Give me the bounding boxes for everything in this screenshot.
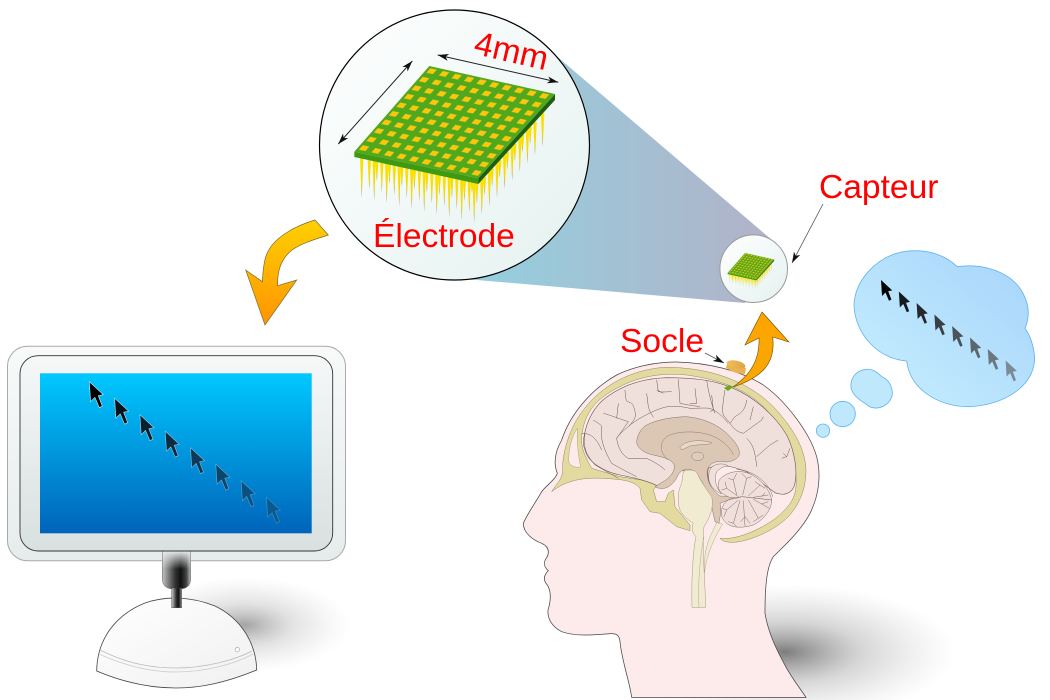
skull and meninges — [552, 367, 806, 542]
arrow: width dimension — [438, 55, 558, 82]
corpus callosum and thalamus — [637, 417, 739, 523]
label: Socle: Socle — [620, 323, 704, 360]
arrow: Socle pointer — [705, 353, 724, 363]
cerebrum — [583, 378, 796, 498]
lateral ventricle — [661, 432, 733, 460]
arrow: depth dimension — [338, 61, 412, 144]
cerebellum — [718, 469, 773, 527]
icon: electrode array — [354, 66, 555, 223]
icon: monitor — [8, 346, 346, 688]
monitor outer frame — [8, 346, 346, 561]
parahippocampal gyrus — [709, 464, 728, 494]
head outline — [523, 362, 819, 697]
cursors in thought cloud — [881, 280, 1017, 381]
label: Électrode: Électrode — [373, 218, 515, 255]
monitor screen — [40, 373, 312, 533]
projection cone — [465, 53, 772, 303]
icon: socle connector — [726, 359, 746, 374]
monitor inner frame — [20, 356, 333, 551]
sensor implant spot — [724, 385, 733, 391]
cloud — [854, 251, 1035, 407]
label: Capteur: Capteur — [819, 169, 938, 206]
icon: thought bubble — [816, 251, 1035, 437]
frontal sinus — [569, 428, 581, 467]
arrow: Capteur pointer — [792, 204, 823, 263]
panel: electrode magnified lens — [320, 10, 590, 280]
brainstem and spinal cord — [704, 523, 723, 573]
thought trail bubbles — [816, 424, 830, 437]
shadow: monitor — [140, 577, 350, 673]
monitor neck — [162, 550, 191, 589]
sulci — [582, 379, 790, 478]
arrow: curved orange to sensor — [733, 312, 789, 387]
shadow: head — [615, 584, 955, 700]
cursors on screen — [89, 382, 280, 523]
icon: head with brain — [523, 362, 819, 697]
panel: sensor small lens — [720, 235, 788, 302]
monitor stem — [172, 588, 182, 608]
label: 4mm: 4mm — [471, 25, 552, 78]
arrow: curved orange to monitor — [246, 220, 328, 325]
monitor base — [97, 598, 257, 688]
icon: small electrode — [728, 253, 774, 289]
